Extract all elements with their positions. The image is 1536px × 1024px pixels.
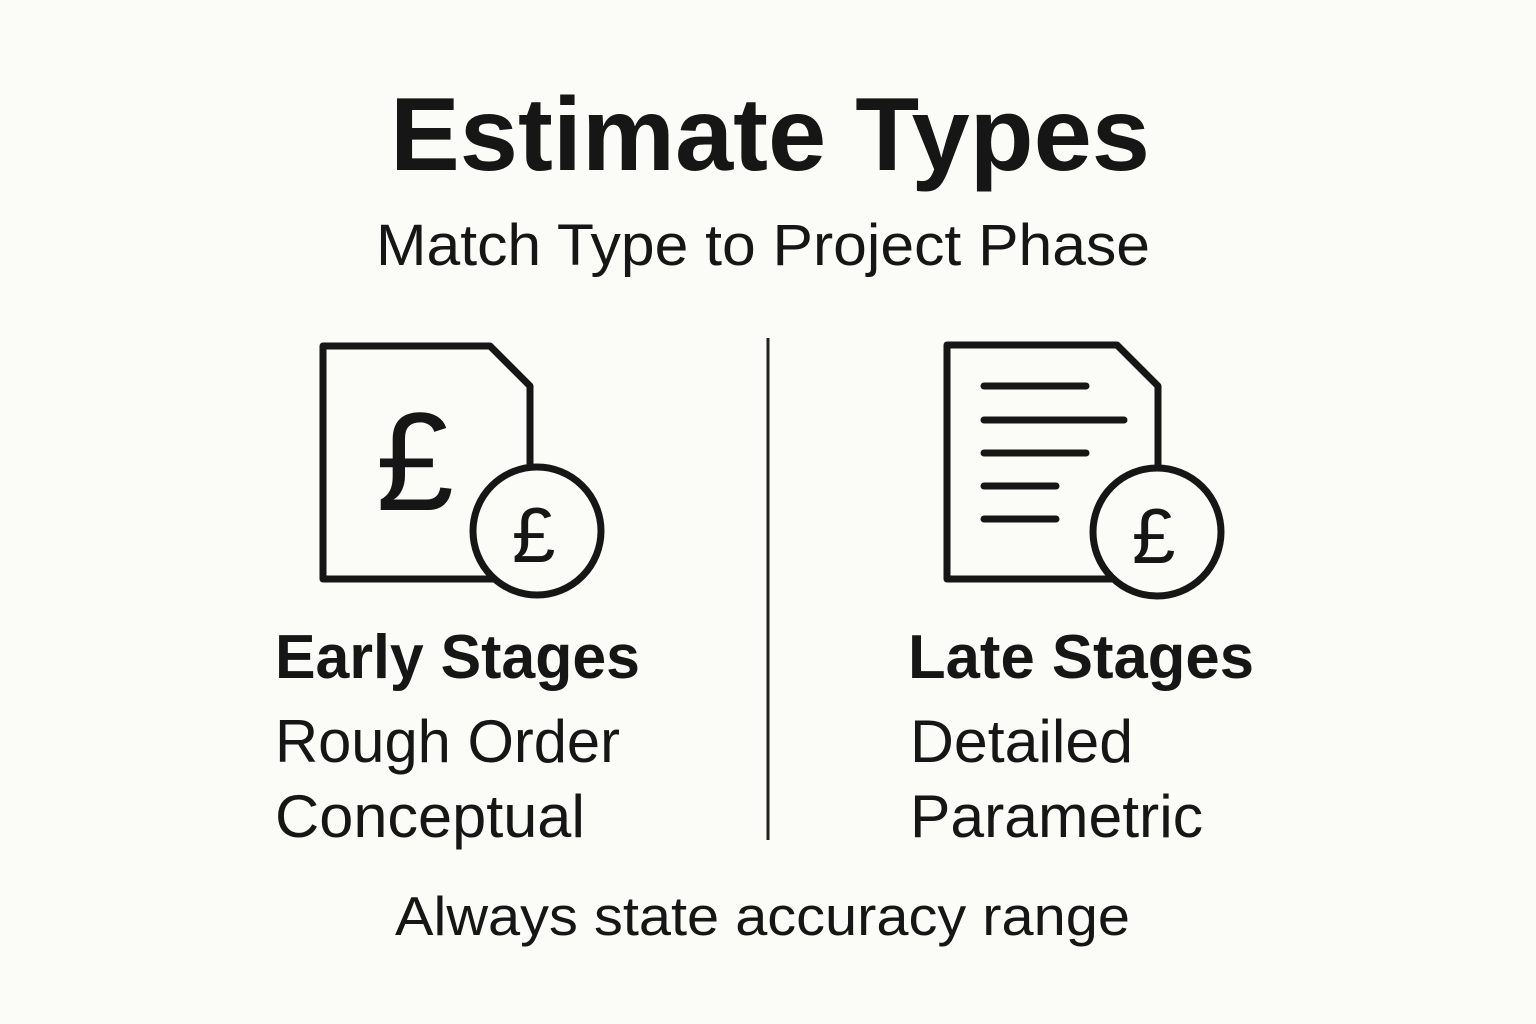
text: late stages: Late Stages <box>908 623 1254 692</box>
text: late stages: Detailed <box>910 708 1133 775</box>
text: early stages: Rough Order <box>275 708 620 775</box>
icon: early stages document with pound: £ <box>512 491 555 579</box>
text: early stages <box>275 623 640 850</box>
footer note: Always state accuracy range <box>395 885 1130 947</box>
text: early stages: Early Stages <box>275 623 640 692</box>
icon: early stages document with pound: £ <box>376 383 454 540</box>
icon: late stages document with lines and pound: £ <box>1132 492 1175 580</box>
divider <box>766 338 770 840</box>
title: Estimate Types <box>390 77 1150 193</box>
text: late stages <box>908 623 1254 850</box>
icon: late stages document with lines and pound <box>947 345 1221 596</box>
text: late stages: Parametric <box>910 783 1203 850</box>
subtitle: Match Type to Project Phase <box>376 213 1150 278</box>
icon: early stages document with pound <box>323 346 601 595</box>
text: early stages: Conceptual <box>275 783 585 850</box>
